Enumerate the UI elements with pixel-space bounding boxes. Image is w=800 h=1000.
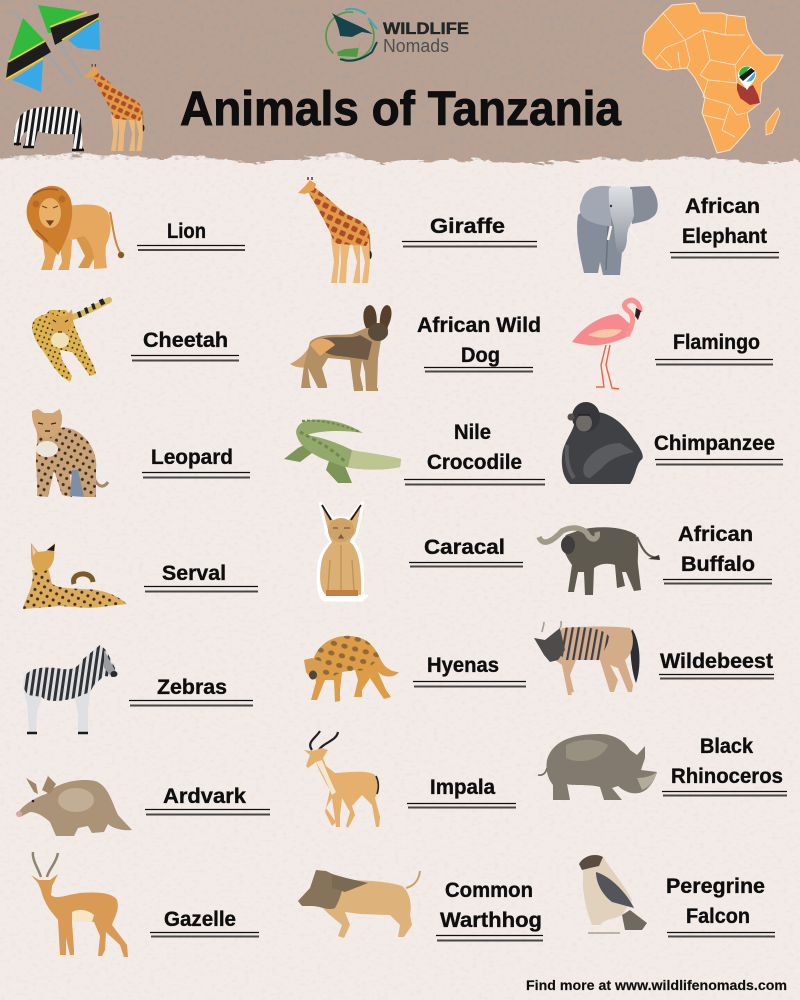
- footer link text: Find more at www.wildlifenomads.com: [526, 978, 787, 993]
- panel: Common Warthhog: [298, 870, 543, 940]
- label: Caracal: [409, 536, 523, 566]
- label: African Elephant: African: [685, 195, 760, 218]
- panel: Cheetah: [32, 300, 239, 382]
- illustration: African wild dog: [290, 305, 392, 391]
- label: Ardvark: Ardvark: [163, 785, 246, 808]
- panel: Nile Crocodile: [284, 419, 545, 484]
- label: Common Warthhog: Warthhog: [440, 909, 542, 932]
- label: Serval: Serval: [162, 562, 226, 585]
- panel: Peregrine Falcon: [579, 855, 775, 936]
- panel: Serval: [23, 543, 258, 609]
- label: Hyenas: Hyenas: [427, 654, 499, 677]
- label: Flamingo: [655, 331, 773, 364]
- panel: Leopard: [32, 409, 250, 497]
- icon: crossed Tanzanian flags: [6, 1, 100, 92]
- illustration: cheetah: [32, 300, 109, 382]
- illustration: leopard: [32, 409, 108, 497]
- label: African Wild Dog: Dog: [461, 344, 500, 367]
- panel: Caracal: [318, 502, 523, 600]
- label: African Elephant: [670, 195, 779, 258]
- panel: Zebras: [23, 645, 253, 734]
- illustration: wildebeest: [534, 621, 639, 695]
- label: Cheetah: Cheetah: [143, 329, 228, 352]
- panel: Impala: [304, 731, 516, 828]
- label: Common Warthhog: Common: [445, 879, 533, 902]
- label: Cheetah: [131, 329, 239, 360]
- illustration: Nile crocodile: [284, 419, 401, 483]
- label: African Buffalo: African: [678, 523, 753, 546]
- logo: Wildlife Nomads: [326, 9, 469, 61]
- title: Animals of Tanzania: [180, 83, 621, 136]
- label: African Wild Dog: African Wild: [417, 314, 541, 337]
- map: Africa with Tanzania highlighted: [643, 3, 783, 153]
- label: Black Rhinoceros: Rhinoceros: [671, 765, 783, 788]
- panel: Black Rhinoceros: [538, 734, 787, 800]
- Tanzania highlight: [737, 83, 760, 105]
- label: African Buffalo: [663, 523, 772, 584]
- label: Nile Crocodile: Crocodile: [427, 451, 522, 474]
- label: African Elephant: Elephant: [682, 225, 767, 248]
- panel: African Buffalo: [539, 523, 772, 595]
- label: Impala: [407, 776, 516, 808]
- illustration: serval: [23, 543, 127, 609]
- panel: African Elephant: [577, 186, 779, 275]
- label: Black Rhinoceros: Black: [700, 735, 753, 758]
- header band: torn kraft paper: [0, 0, 800, 164]
- label: Caracal: Caracal: [424, 536, 505, 559]
- illustration: African elephant: [577, 186, 658, 275]
- label: Flamingo: Flamingo: [673, 331, 760, 354]
- illustration: chimpanzee: [562, 402, 643, 484]
- panel: Ardvark: [16, 776, 270, 836]
- label: Hyenas: [413, 654, 526, 686]
- illustration: peregrine falcon: [579, 855, 647, 933]
- illustration: impala: [304, 731, 380, 828]
- illustration: aardvark: [16, 776, 132, 836]
- label: Impala: Impala: [430, 776, 495, 799]
- label: Black Rhinoceros: [662, 735, 787, 796]
- illustration: hyena: [304, 636, 399, 702]
- panel: African Wild Dog: [290, 305, 541, 391]
- label: Nile Crocodile: Nile: [454, 421, 491, 444]
- illustration: gazelle: [31, 852, 128, 957]
- illustration: giraffe: [298, 177, 372, 283]
- illustration: African buffalo: [539, 527, 660, 595]
- icon: small zebra in header: [14, 107, 84, 150]
- panel: Flamingo: [572, 300, 773, 389]
- panel: Lion: [27, 186, 245, 270]
- illustration: flamingo: [572, 300, 641, 389]
- map pin with flag: [738, 66, 756, 90]
- label: Common Warthhog: [436, 879, 543, 940]
- label: Giraffe: Giraffe: [430, 215, 505, 238]
- label: Giraffe: [402, 215, 537, 246]
- illustration: zebra: [23, 645, 118, 734]
- label: Zebras: [129, 676, 253, 706]
- label: Chimpanzee: [654, 432, 783, 464]
- label: Serval: [144, 562, 258, 592]
- logo: Wildlife Nomads: Nomads: [383, 36, 449, 56]
- label: African Buffalo: Buffalo: [681, 553, 755, 576]
- label: Peregrine Falcon: Peregrine: [666, 875, 765, 898]
- illustration: caracal sticker: [318, 502, 366, 600]
- label: Gazelle: [150, 908, 259, 936]
- label: Lion: Lion: [167, 220, 206, 243]
- label: Lion: [137, 220, 245, 250]
- label: Peregrine Falcon: Falcon: [686, 905, 750, 928]
- label: Leopard: Leopard: [151, 446, 233, 469]
- label: Gazelle: Gazelle: [164, 908, 236, 931]
- panel: Giraffe: [298, 177, 537, 283]
- label: Nile Crocodile: [404, 421, 545, 484]
- label: African Wild Dog: [417, 314, 541, 372]
- label: Chimpanzee: Chimpanzee: [654, 432, 775, 455]
- label: Zebras: Zebras: [157, 676, 227, 699]
- label: Ardvark: [145, 785, 270, 814]
- illustration: lion: [27, 186, 124, 270]
- label: Wildebeest: Wildebeest: [660, 650, 773, 673]
- label: Peregrine Falcon: [666, 875, 775, 936]
- illustration: black rhinoceros: [538, 734, 657, 800]
- small giraffe in header: [84, 64, 144, 151]
- label: Leopard: [142, 446, 250, 478]
- illustration: warthog: [298, 870, 420, 938]
- panel: Hyenas: [304, 636, 526, 702]
- panel: Chimpanzee: [562, 402, 783, 484]
- logo: Wildlife Nomads: WILDLIFE: [383, 20, 469, 38]
- panel: Gazelle: [31, 852, 259, 957]
- panel: Wildebeest: [534, 621, 774, 695]
